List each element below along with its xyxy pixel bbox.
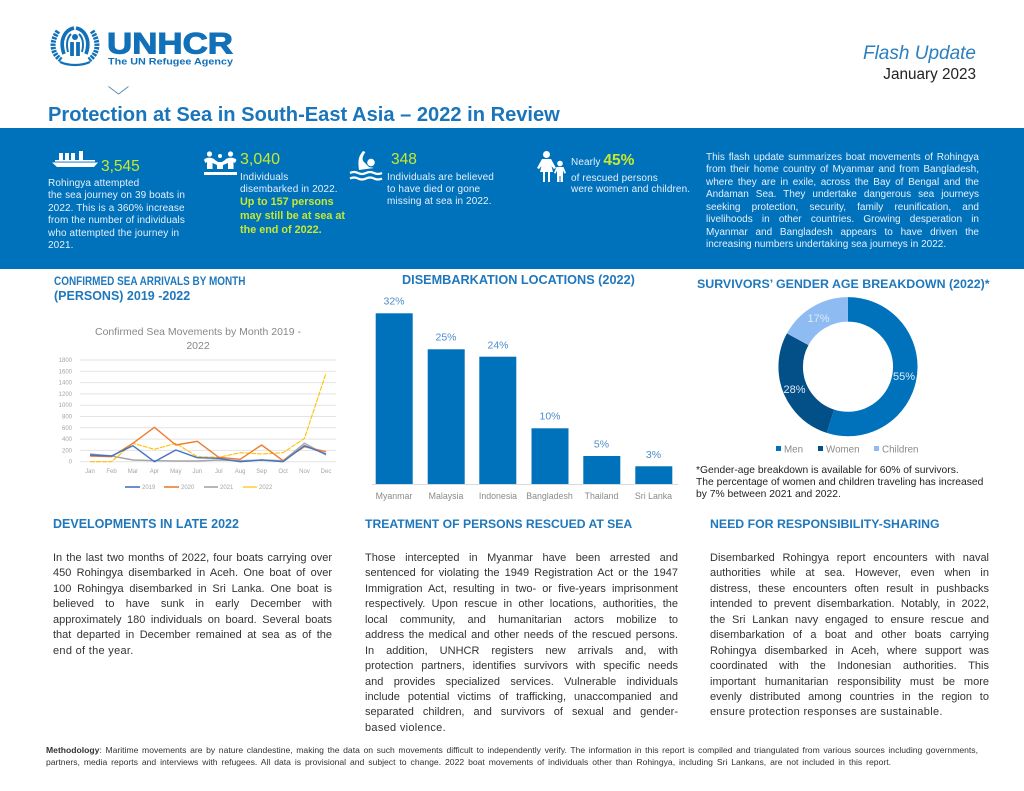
- y axis labels: 1600: [59, 369, 73, 375]
- month labels: Jul: [215, 469, 223, 475]
- wordmark: UNHCR: [107, 27, 233, 60]
- y axis labels: 800: [62, 414, 73, 420]
- text: developments: approximately 180 individuals on board. Several boats: [53, 614, 332, 626]
- text: methodology: partners, media reports and interviews with refugees. All data is provisional and subject to change. 2022 boat movements of individuals other than Rohingya, including Sri Lankans, are not included in this report.: [46, 757, 891, 767]
- heading: disembarkation locations: DISEMBARKATION LOCATIONS (2022): [402, 273, 635, 287]
- month labels: Aug: [235, 469, 246, 475]
- text: responsibility-sharing: coordinated with the Indonesian authorities. This: [710, 660, 989, 672]
- text: responsibility-sharing: intended to prevent disembarkation. Notably, in 2022,: [710, 598, 989, 610]
- text: treatment: sentenced for violating the 1949 Registration Act or the 1947: [365, 567, 678, 579]
- chart legend: 2019: [142, 485, 156, 491]
- text: treatment: based violence.: [365, 722, 446, 734]
- line chart: monthly sea movements: [59, 326, 336, 491]
- heading: developments in late 2022: DEVELOPMENTS IN LATE 2022: [53, 516, 239, 530]
- UNHCR logo: The UN Refugee Agency: [108, 56, 234, 68]
- icon: boat with people: [52, 151, 98, 167]
- y axis labels: [59, 358, 73, 466]
- heading: need for responsibility-sharing: NEED FOR RESPONSIBILITY-SHARING: [710, 516, 940, 530]
- text: treatment: and provides specialized services. Vulnerable individuals: [365, 676, 678, 688]
- text: attempted description: Rohingya attempted: [48, 178, 139, 189]
- text: disembarked description: [240, 172, 338, 195]
- donut legend: Children: [882, 444, 918, 456]
- y axis labels: 1200: [59, 392, 73, 398]
- text: flash update summary: from their home country of Myanmar and from Bangladesh,: [706, 164, 979, 175]
- donut legend: [776, 444, 918, 456]
- bar values: 24%: [487, 340, 509, 352]
- UNHCR logo: [50, 26, 234, 68]
- text: women and children description: were women and children.: [571, 184, 690, 195]
- stat: women and children: Nearly 45%: [571, 152, 634, 169]
- icon: group of people disembarking: [204, 151, 237, 175]
- text: women and children description: [571, 172, 690, 195]
- month labels: Nov: [299, 469, 310, 475]
- text: gender age footnote: [696, 464, 983, 500]
- text: developments: believed to have sunk in early December with: [53, 598, 332, 610]
- chart title: 2022: [186, 340, 210, 352]
- text: treatment: include potential victims of trafficking, unaccompanied and: [365, 691, 678, 703]
- chart legend: [125, 485, 273, 491]
- text: missing description: [387, 172, 494, 207]
- title: Protection at Sea in South-East Asia – 2022 in Review: [48, 104, 560, 126]
- bar values: [383, 296, 661, 461]
- y axis labels: 0: [69, 460, 73, 466]
- text: attempted description: who attempted the journey in: [48, 228, 179, 239]
- donut legend: Women: [826, 444, 860, 456]
- series lines: [90, 373, 326, 462]
- bar values: 25%: [435, 332, 457, 344]
- text: gender age footnote: by 7% between 2021 and 2022.: [696, 489, 841, 500]
- heading: confirmed sea arrivals: CONFIRMED SEA ARRIVALS BY MONTH: [54, 274, 245, 288]
- y axis labels: 400: [62, 437, 73, 443]
- text: methodology: [46, 745, 978, 767]
- donut legend: Men: [784, 444, 803, 456]
- bar values: 10%: [539, 410, 561, 422]
- month labels: [85, 469, 331, 475]
- text: responsibility-sharing: ensure protection responses are sustainable.: [710, 706, 943, 718]
- category labels: Bangladesh: [526, 491, 573, 501]
- chart title: Confirmed Sea Movements by Month 2019 -: [95, 326, 302, 338]
- month labels: Mar: [128, 469, 138, 475]
- bar values: 32%: [383, 296, 405, 308]
- text: responsibility-sharing: authorities while at sea. However, even when in: [710, 567, 989, 579]
- month labels: Apr: [150, 469, 159, 475]
- text: women and children description: of rescued persons: [571, 172, 658, 184]
- text: treatment: Those intercepted in Myanmar have been arrested and: [365, 552, 678, 564]
- callout: still at sea: Up to 157 persons: [240, 196, 334, 208]
- month labels: Dec: [321, 469, 331, 475]
- text: attempted description: 2022. This is a 360% increase: [48, 203, 185, 214]
- text: responsibility-sharing: Disembarked Rohingya report encounters with naval: [710, 552, 989, 564]
- icon: swimmer in water: [350, 151, 382, 181]
- text: missing description: missing at sea in 2022.: [387, 196, 492, 207]
- text: responsibility-sharing: disembarkation of a boat and other boats carrying: [710, 629, 989, 641]
- flash update label: Flash Update: [863, 43, 976, 64]
- category labels: Malaysia: [429, 491, 463, 501]
- text: missing description: to have died or gone: [387, 184, 480, 195]
- panel: key figures band: [0, 128, 1024, 268]
- text: methodology: Methodology: Maritime movements are by nature clandestine, making the data on such movements difficult to independently verify. The information in this report is compiled and triangulated from various sources including governments,: [46, 745, 978, 755]
- chart legend: 2021: [220, 485, 234, 491]
- heading: treatment of persons rescued: TREATMENT OF PERSONS RESCUED AT SEA: [365, 516, 632, 530]
- text: flash update summary: increasing numbers undertaking sea journeys in 2022.: [706, 239, 946, 250]
- text: developments: end of the year.: [53, 645, 134, 657]
- donut values: 55%: [893, 371, 915, 383]
- text: missing description: Individuals are believed: [387, 172, 494, 182]
- heading: gender age breakdown: SURVIVORS’ GENDER AGE BREAKDOWN (2022)*: [697, 276, 990, 290]
- y axis labels: 1400: [59, 381, 73, 387]
- month labels: Jun: [192, 469, 202, 475]
- chart legend: 2020: [181, 485, 195, 491]
- text: responsibility-sharing: Rohingya disembarked in Aceh, where support was: [710, 645, 989, 657]
- category labels: Thailand: [585, 491, 618, 501]
- text: attempted description: from the number of individuals: [48, 215, 185, 226]
- text: attempted description: the sea journey on 39 boats in: [48, 190, 185, 201]
- month labels: Jan: [85, 469, 95, 475]
- heading: confirmed sea arrivals: [54, 274, 245, 303]
- text: treatment: local community, and humanitarian actors mobilize to: [365, 614, 678, 626]
- callout: still at sea: [240, 196, 345, 236]
- donut values: [783, 313, 915, 396]
- icon: woman and child: [537, 151, 566, 182]
- text: treatment: address the medical and other needs of the rescued persons.: [365, 629, 678, 641]
- callout: still at sea: the end of 2022.: [240, 224, 322, 236]
- category labels: Sri Lanka: [635, 491, 672, 501]
- donut values: 17%: [807, 313, 830, 325]
- text: flash update summary: [706, 152, 979, 250]
- month labels: Oct: [278, 469, 288, 475]
- text: responsibility-sharing: important humanitarian responsibility must be more: [710, 676, 989, 688]
- text: flash update summary: where they are in exile, across the Bay of Bengal and the: [706, 177, 979, 188]
- text: responsibility-sharing: evenly distributed among countries in the region to: [710, 691, 989, 703]
- stat: attempted: 3,545: [101, 158, 140, 175]
- text: flash update summary: livelihoods in other countries. Growing desperation in: [706, 214, 979, 225]
- text: developments: In the last two months of 2022, four boats carrying over: [53, 552, 332, 564]
- text: treatment: separated children, and survivors of sexual and gender-: [365, 706, 678, 718]
- bar chart: disembarkation locations: [372, 296, 678, 501]
- text: disembarked description: Individuals: [240, 172, 288, 183]
- text: flash update summary: Myanmar and Bangladesh appears to have driven the: [706, 227, 979, 238]
- text: developments: that departed in December remained at sea as of the: [53, 629, 332, 641]
- heading: confirmed sea arrivals: (PERSONS) 2019 -2022: [54, 289, 190, 303]
- text: developments: 450 Rohingya disembarked in Aceh. One boat of over: [53, 567, 332, 579]
- donut values: 28%: [783, 384, 806, 396]
- y axis labels: 1800: [59, 358, 73, 364]
- text: developments: 100 Rohingya disembarked in Sri Lanka. One boat is: [53, 583, 332, 595]
- text: treatment: respectively. Upon rescue in other locations, authorities, the: [365, 598, 678, 610]
- y axis labels: 600: [62, 426, 73, 432]
- y axis labels: 200: [62, 448, 73, 454]
- text: flash update summary: seeking protection, security, family reunification, and: [706, 202, 979, 213]
- stat: missing: 348: [391, 151, 417, 168]
- text: treatment: In addition, UNHCR registers new arrivals and, with: [365, 645, 678, 657]
- category labels: [376, 491, 672, 501]
- text: attempted description: 2021.: [48, 240, 74, 251]
- text: attempted description: [48, 178, 185, 251]
- bar values: 3%: [646, 449, 661, 461]
- month labels: Sep: [256, 469, 268, 475]
- text: flash update summary: Andaman Sea. They undertake dangerous sea journeys: [706, 189, 979, 200]
- text: responsibility-sharing: [710, 552, 989, 718]
- bar values: 5%: [594, 438, 609, 450]
- text: gender age footnote: *Gender-age breakdown is available for 60% of survivors.: [696, 464, 959, 476]
- text: flash update summary: This flash update summarizes boat movements of Rohingya: [706, 152, 979, 162]
- month labels: May: [170, 469, 181, 475]
- icon: laurel wreath with sheltering hands: [53, 28, 97, 65]
- text: disembarked description: disembarked in 2022.: [240, 184, 338, 195]
- chart legend: 2022: [259, 485, 273, 491]
- text: developments: [53, 552, 332, 657]
- chevron mark: [108, 86, 129, 94]
- date: January 2023: [883, 66, 976, 83]
- text: gender age footnote: The percentage of women and children traveling has increased: [696, 477, 983, 488]
- text: treatment: [365, 552, 678, 734]
- text: responsibility-sharing: the Sri Lankan navy engaged to ensure rescue and: [710, 614, 989, 626]
- text: treatment: protection partners, identifies survivors with specific needs: [365, 660, 678, 672]
- category labels: Myanmar: [376, 491, 412, 501]
- text: treatment: Immigration Act, resulting in two- or five-years imprisonment: [365, 583, 678, 595]
- y axis labels: 1000: [59, 403, 73, 409]
- category labels: Indonesia: [479, 491, 517, 501]
- donut chart: gender age breakdown: [776, 297, 918, 456]
- bars: [376, 313, 672, 484]
- month labels: Feb: [106, 469, 117, 475]
- text: responsibility-sharing: distress, these encounters often result in pushbacks: [710, 583, 989, 595]
- stat: disembarked: 3,040: [240, 151, 280, 168]
- callout: still at sea: may still be at sea at: [240, 210, 345, 222]
